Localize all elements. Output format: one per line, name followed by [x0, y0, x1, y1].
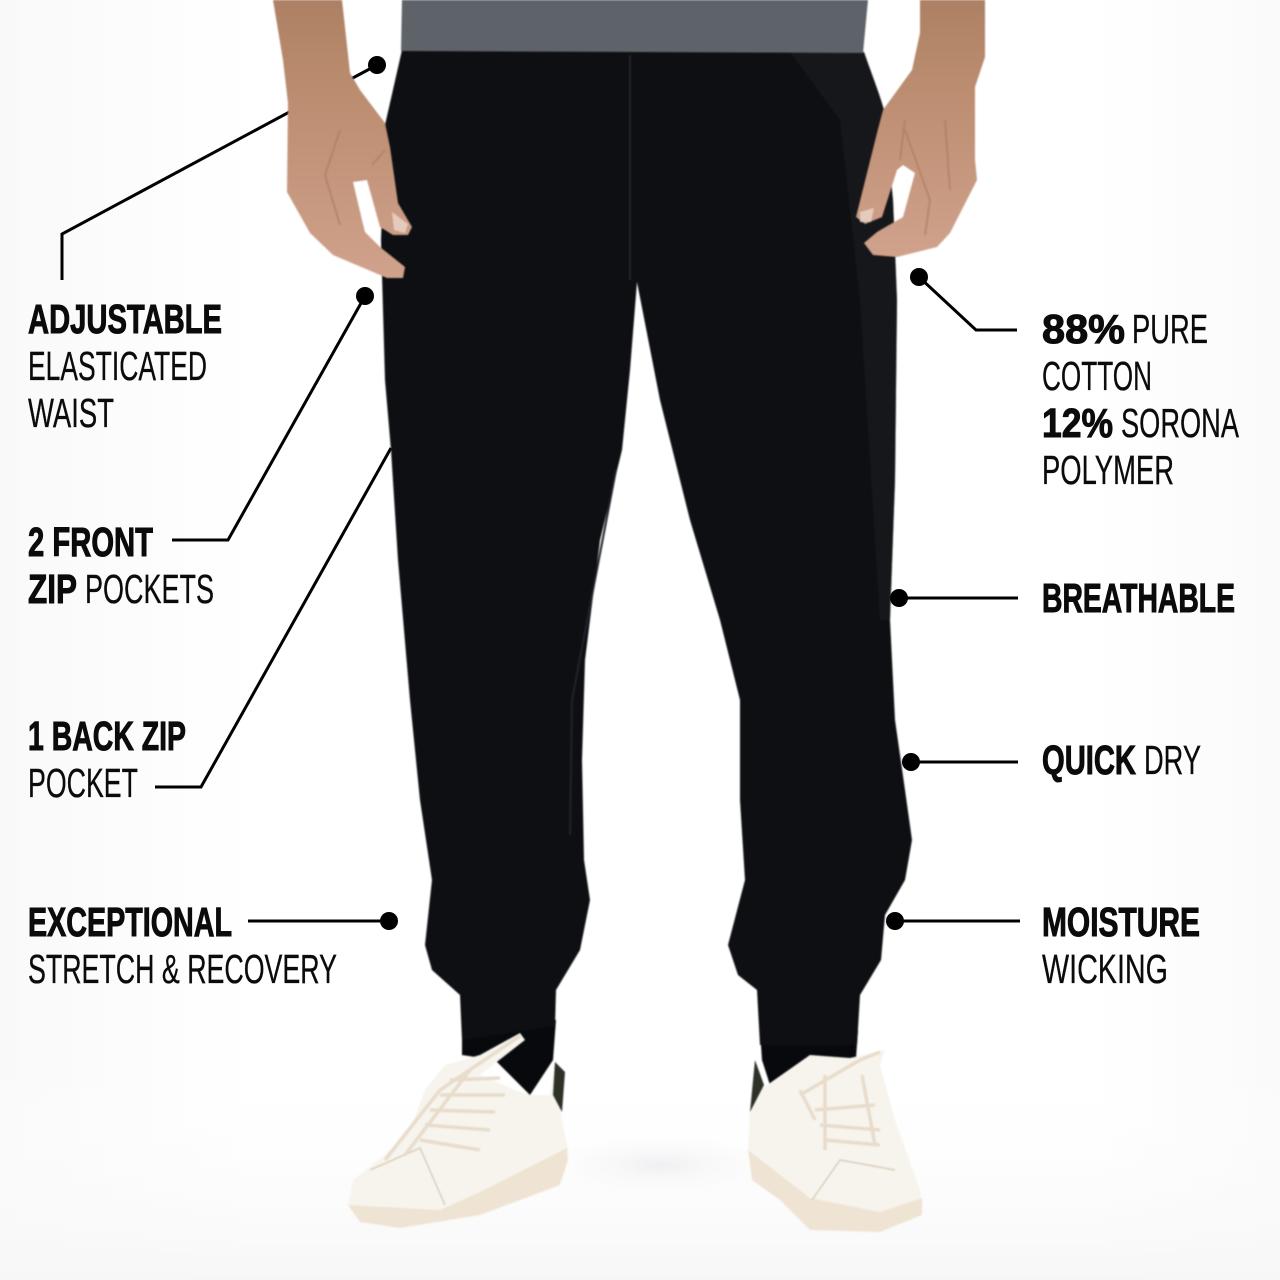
label: 2 front zip pockets: ZIP [28, 566, 77, 612]
t-shirt hem [401, 0, 868, 53]
label: moisture wicking [1042, 899, 1200, 992]
label: moisture wicking: WICKING [1042, 946, 1168, 992]
label: 1 back zip pocket: POCKET [28, 760, 138, 806]
label: cotton and sorona blend [1042, 306, 1239, 493]
jogger fold details [570, 55, 630, 835]
label: adjustable elasticated waist: ADJUSTABLE [28, 296, 222, 342]
label: adjustable elasticated waist: ELASTICATED [28, 343, 207, 389]
thumbnail details [392, 208, 874, 233]
left shoe heel tab [553, 1062, 565, 1112]
photo: man wearing joggers [273, 0, 985, 1232]
label: 2 front zip pockets: 2 FRONT [28, 519, 153, 565]
right shoe heel tab [750, 1060, 764, 1112]
label: moisture wicking: MOISTURE [1042, 899, 1200, 945]
left toe cap seam [370, 1148, 445, 1205]
shoelaces [385, 1036, 880, 1160]
label: quick dry: QUICK [1042, 737, 1136, 783]
right shoe sole [748, 1150, 922, 1232]
label: 2 front zip pockets [28, 519, 214, 612]
label: adjustable elasticated waist [28, 296, 222, 436]
label: cotton and sorona blend: COTTON [1042, 353, 1152, 399]
floor shading [0, 1060, 1280, 1280]
label: cotton and sorona blend: 12% [1042, 400, 1113, 446]
label: 1 back zip pocket [28, 713, 186, 806]
label: exceptional stretch and recovery [28, 899, 337, 992]
left shoe [348, 1033, 568, 1228]
left arm and hand [273, 0, 412, 278]
label: quick dry: DRY [1144, 737, 1201, 783]
right toe cap seam [812, 1160, 895, 1200]
label: cotton and sorona blend: 88% [1042, 306, 1125, 352]
label: 2 front zip pockets: POCKETS [85, 566, 214, 612]
knuckle and finger shading [325, 120, 950, 235]
socks [462, 1020, 858, 1095]
floor shadow between shoes [530, 1130, 790, 1200]
callout leader lines [62, 65, 1020, 921]
label: cotton and sorona blend: PURE [1132, 306, 1208, 352]
label: exceptional stretch and recovery: EXCEPTIONAL [28, 899, 232, 945]
right shoe [748, 1050, 922, 1232]
callout dots [356, 56, 928, 930]
label: cotton and sorona blend: POLYMER [1042, 447, 1174, 493]
label: exceptional stretch and recovery: STRETCH & RECOVERY [28, 946, 337, 992]
jogger right side sheen [790, 52, 897, 620]
label: adjustable elasticated waist: WAIST [28, 390, 114, 436]
right arm and hand [856, 0, 985, 257]
joggers [381, 50, 912, 1045]
label: 1 back zip pocket: 1 BACK ZIP [28, 713, 186, 759]
left shoe sole [348, 1148, 568, 1228]
